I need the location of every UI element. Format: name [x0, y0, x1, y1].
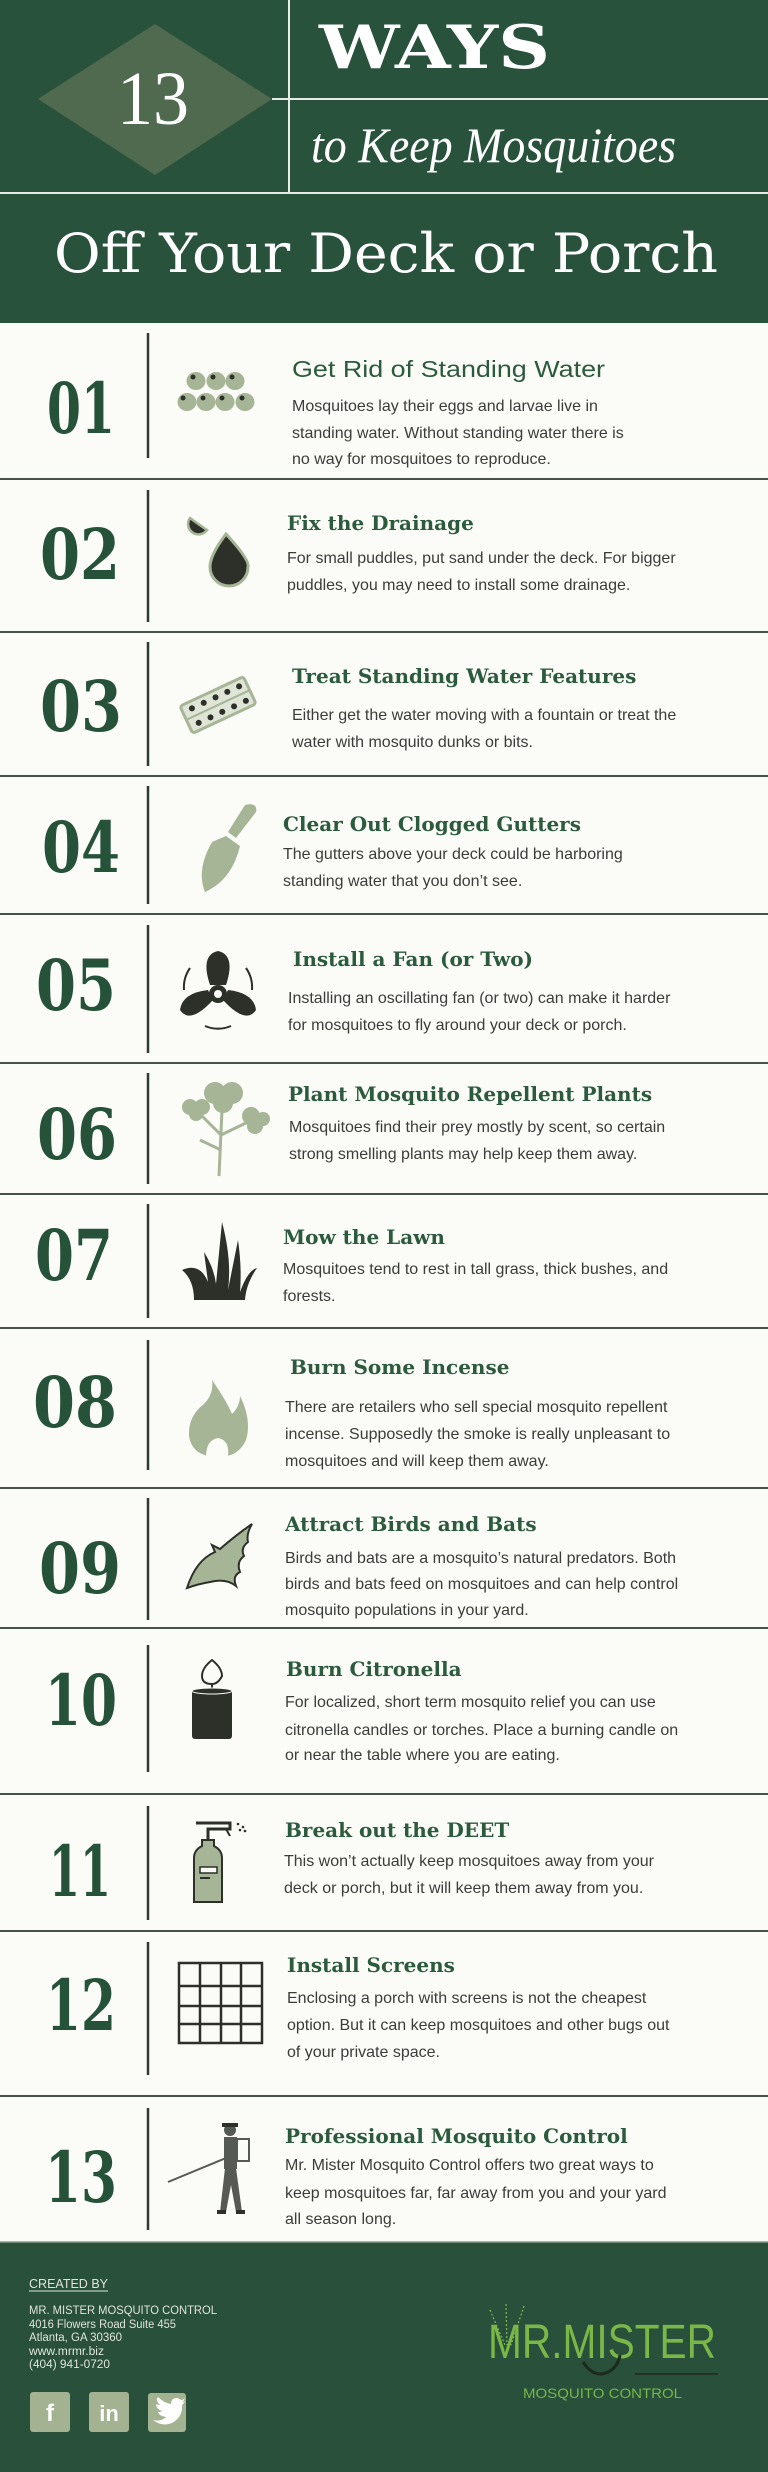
diamond badge with 13: 13 [117, 57, 189, 141]
row 09: Attract Birds and Bats [284, 1512, 537, 1536]
icon: mosquito dunks blister pack [180, 677, 256, 733]
row 04 [42, 786, 623, 904]
icon: garden trowel [202, 804, 256, 892]
row 01: no way for mosquitoes to reproduce. [292, 451, 551, 468]
row 13 [45, 2108, 667, 2230]
logo: Mr. Mister Mosquito Control: MR.MISTER [488, 2316, 716, 2369]
row 03: water with mosquito dunks or bits. [291, 734, 533, 751]
row 10: or near the table where you are eating. [285, 1747, 560, 1764]
icon: window screen grid [179, 1963, 262, 2043]
row 05: Installing an oscillating fan (or two) can make it harder [288, 990, 671, 1007]
row 02: For small puddles, put sand under the deck. For bigger [287, 550, 676, 567]
row 07: 07 [35, 1214, 113, 1297]
row 13: Mr. Mister Mosquito Control offers two great ways to [285, 2157, 654, 2174]
row 11: deck or porch, but it will keep them away from you. [284, 1880, 643, 1897]
logo: Mr. Mister Mosquito Control [488, 2304, 718, 2401]
row 04: standing water that you don’t see. [283, 873, 522, 890]
row 11 [49, 1806, 655, 1920]
row 02: puddles, you may need to install some drainage. [287, 577, 630, 594]
diamond badge with 13 [38, 24, 272, 175]
social icons: in [99, 2401, 119, 2426]
row dividers [0, 479, 768, 2096]
icon: incense flame [189, 1380, 248, 1457]
row 06 [37, 1073, 665, 1184]
row 04: 04 [42, 806, 120, 889]
row 10: citronella candles or torches. Place a burning candle on [285, 1722, 678, 1739]
subtitle: to Keep Mosquitoes: to Keep Mosquitoes [311, 117, 676, 173]
row 05 [36, 925, 671, 1053]
row 03: 03 [40, 665, 122, 748]
footer [0, 2242, 768, 2472]
row 07 [35, 1204, 668, 1318]
icon: grass [182, 1222, 257, 1300]
row 05: 05 [36, 944, 116, 1027]
row 09: Birds and bats are a mosquito’s natural predators. Both [285, 1550, 676, 1567]
created by block: MR. MISTER MOSQUITO CONTROL [29, 2305, 218, 2317]
row 01: standing water. Without standing water there is [292, 425, 624, 442]
row 08: mosquitoes and will keep them away. [285, 1453, 549, 1470]
row 10: 10 [45, 1659, 117, 1742]
icon: fan [180, 951, 256, 1029]
created by block: www.mrmr.biz [28, 2346, 104, 2358]
row 06: strong smelling plants may help keep them away. [289, 1146, 637, 1163]
row 08 [33, 1340, 670, 1470]
row 12: of your private space. [287, 2044, 440, 2061]
created by block [28, 2276, 218, 2371]
row 09: birds and bats feed on mosquitoes and can help control [285, 1576, 678, 1593]
row 02 [40, 490, 676, 622]
row 07: Mow the Lawn [283, 1225, 445, 1249]
row 07: Mosquitoes tend to rest in tall grass, thick bushes, and [283, 1261, 668, 1278]
row 10: For localized, short term mosquito relief you can use [285, 1694, 656, 1711]
icon: DEET spray bottle [194, 1823, 246, 1902]
row 02: 02 [40, 513, 120, 596]
row 09: mosquito populations in your yard. [285, 1602, 529, 1619]
title: WAYS: WAYS [318, 13, 550, 83]
row 08: There are retailers who sell special mosquito repellent [285, 1399, 668, 1416]
icon: water drops [188, 518, 248, 586]
row 12: Install Screens [287, 1953, 455, 1977]
row 06: Mosquitoes find their prey mostly by scent, so certain [289, 1119, 665, 1136]
row 11: 11 [49, 1830, 111, 1913]
row 13: 13 [45, 2136, 117, 2219]
row 10: Burn Citronella [286, 1657, 462, 1681]
social icons: f [46, 2400, 55, 2427]
icon: citronella candle [192, 1660, 232, 1739]
row 10 [45, 1645, 678, 1772]
icon: eggs [178, 372, 254, 411]
row 13: all season long. [285, 2211, 396, 2228]
header [0, 0, 768, 323]
row 13: keep mosquitoes far, far away from you and your yard [285, 2185, 667, 2202]
row 08: incense. Supposedly the smoke is really unpleasant to [285, 1426, 670, 1443]
row 03: Either get the water moving with a fountain or treat the [292, 707, 676, 724]
icon: man with sprayer [168, 2123, 249, 2214]
social icons [30, 2392, 186, 2432]
created by block: (404) 941-0720 [29, 2359, 110, 2371]
row 09: 09 [39, 1527, 121, 1610]
created by block: Atlanta, GA 30360 [29, 2332, 122, 2344]
row 07: forests. [283, 1288, 335, 1305]
row 01: Get Rid of Standing Water [292, 356, 605, 382]
row 11: This won’t actually keep mosquitoes away from your [284, 1853, 655, 1870]
row 01: Mosquitoes lay their eggs and larvae live in [292, 398, 598, 415]
row 09 [39, 1498, 678, 1620]
row 04: The gutters above your deck could be harboring [283, 846, 623, 863]
row 05: for mosquitoes to fly around your deck or porch. [288, 1017, 627, 1034]
row 12 [46, 1942, 670, 2075]
row 13: Professional Mosquito Control [285, 2124, 628, 2148]
row 01 [47, 333, 624, 468]
row 08: 08 [33, 1361, 117, 1444]
created by block: 4016 Flowers Road Suite 455 [29, 2319, 176, 2331]
row 03: Treat Standing Water Features [292, 664, 636, 688]
row 03 [40, 642, 676, 766]
row 12: Enclosing a porch with screens is not the cheapest [287, 1990, 647, 2007]
logo: Mr. Mister Mosquito Control: MOSQUITO CONTROL [523, 2385, 682, 2401]
title: Off Your Deck or Porch: Off Your Deck or Porch [54, 222, 718, 285]
row 08: Burn Some Incense [290, 1355, 509, 1379]
row 12: option. But it can keep mosquitoes and other bugs out [287, 2017, 670, 2034]
row 11: Break out the DEET [285, 1818, 509, 1842]
row 12: 12 [46, 1964, 116, 2047]
row 06: 06 [37, 1093, 117, 1176]
icon: plant [182, 1082, 270, 1176]
row 01: 01 [47, 367, 115, 450]
icon: bat [187, 1524, 252, 1588]
row 06: Plant Mosquito Repellent Plants [288, 1082, 652, 1106]
created by block: CREATED BY [29, 2276, 108, 2291]
row 04: Clear Out Clogged Gutters [283, 812, 581, 836]
row 05: Install a Fan (or Two) [293, 947, 533, 971]
row 02: Fix the Drainage [287, 511, 474, 535]
